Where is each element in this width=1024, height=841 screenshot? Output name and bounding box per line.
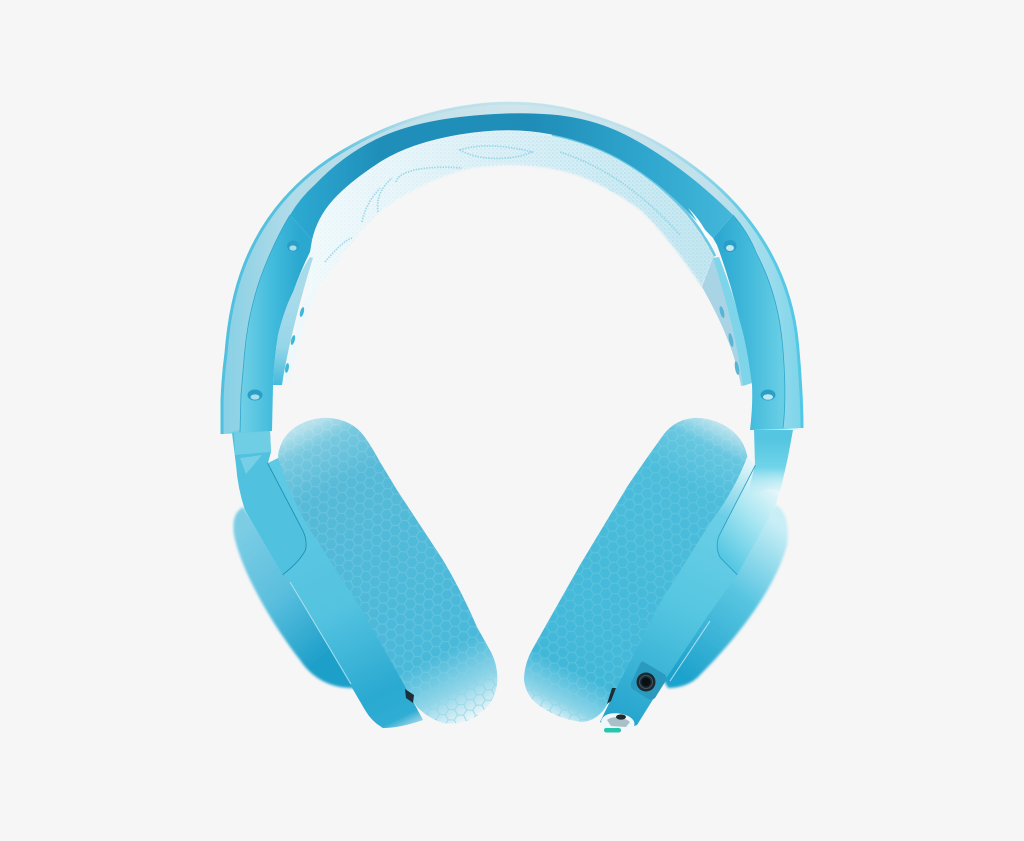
headband: pale outer rim (221, 102, 803, 434)
right mic port (601, 713, 634, 730)
right ear pad (524, 418, 748, 722)
left white edge highlight (290, 582, 351, 684)
left small slot (405, 689, 414, 703)
left yoke stem (232, 431, 307, 575)
right headband lower arm (713, 215, 802, 430)
white gap behind right band (688, 208, 713, 246)
small slot (607, 688, 616, 704)
screw hole right lower (760, 390, 776, 400)
left cup ring band (268, 458, 423, 728)
headphone jack surround (631, 662, 666, 700)
headphone jack (636, 672, 656, 692)
green indicator light (604, 728, 621, 732)
left back shell (233, 507, 420, 690)
illustration: light blue over-ear headset (220, 102, 804, 732)
headband fabric cushion (306, 130, 716, 302)
left headband lower arm (223, 215, 312, 434)
screw hole left lower (248, 390, 262, 400)
screw hole left upper (287, 240, 299, 252)
headband: dark inner top band (290, 113, 733, 240)
screw hole right upper (724, 240, 736, 252)
left headband inner slider (273, 257, 318, 385)
left ear pad (278, 418, 497, 724)
right cup ring band (600, 457, 755, 729)
right white edge highlight (670, 621, 710, 681)
right yoke stem (717, 430, 793, 575)
right headband inner slider (702, 257, 752, 386)
fabric binding edge on right (552, 134, 715, 256)
headband: bright outer edge (222, 103, 802, 434)
right back shell (640, 505, 788, 688)
